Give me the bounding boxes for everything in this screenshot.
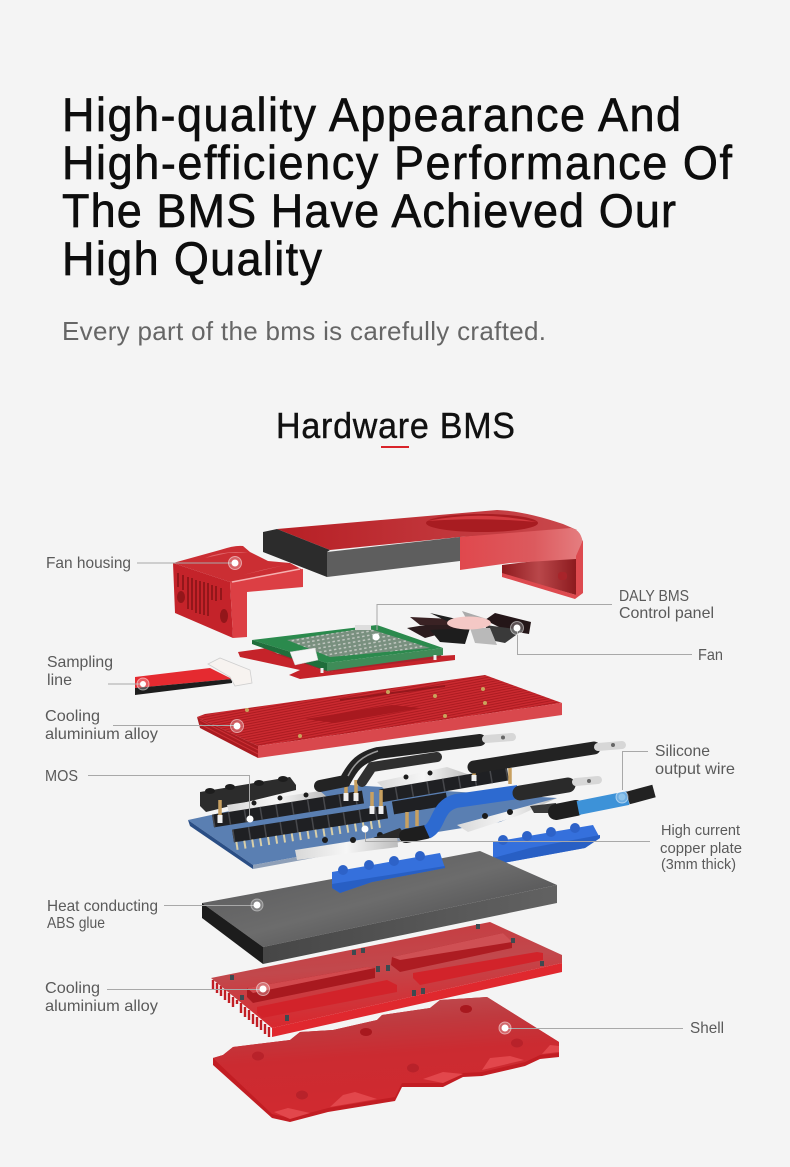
callout: Heat conducting ABS glue: Heat conducting bbox=[47, 898, 158, 915]
callout: Sampling line bbox=[47, 654, 149, 690]
title bbox=[62, 88, 732, 285]
subtitle: Every part of the bms is carefully crafted. bbox=[62, 316, 546, 346]
callout: Shell: Shell bbox=[690, 1020, 724, 1037]
callout: upper Cooling aluminium alloy: Cooling bbox=[45, 708, 100, 725]
callout: lower Cooling aluminium alloy bbox=[45, 980, 270, 1015]
exploded BMS diagram bbox=[135, 510, 654, 1122]
part: upper cooling alloy bbox=[197, 675, 562, 758]
part: control panel PCB bbox=[238, 625, 455, 679]
callout: Silicone output wire bbox=[616, 743, 735, 803]
part: copper plate right bbox=[493, 823, 600, 863]
part: heat conducting ABS glue bbox=[202, 851, 557, 964]
callout: Shell bbox=[499, 1020, 724, 1037]
section heading: Hardware BMS bbox=[276, 406, 515, 446]
callout: High current copper plate bbox=[362, 822, 742, 873]
callout: High current copper plate: (3mm thick) bbox=[661, 856, 736, 873]
part: copper plate front bbox=[332, 851, 445, 893]
part: lower cooling alloy bbox=[211, 922, 562, 1037]
callout: Silicone output wire: output wire bbox=[655, 761, 735, 778]
callout: Heat conducting ABS glue: ABS glue bbox=[47, 915, 105, 932]
callout: High current copper plate: High current bbox=[661, 822, 741, 839]
callout: Sampling line: Sampling bbox=[47, 654, 113, 671]
callout: MOS bbox=[45, 768, 254, 822]
callout: Fan housing bbox=[46, 555, 242, 572]
callout: MOS: MOS bbox=[45, 768, 78, 785]
callout: Silicone output wire: Silicone bbox=[655, 743, 710, 760]
callout: DALY BMS Control panel: DALY BMS bbox=[619, 588, 689, 605]
part: fan bbox=[407, 611, 531, 645]
callout: DALY BMS Control panel: Control panel bbox=[619, 605, 714, 622]
callout: upper Cooling aluminium alloy bbox=[45, 708, 244, 743]
title: High-quality Appearance And bbox=[62, 88, 681, 141]
title: The BMS Have Achieved Our bbox=[62, 184, 676, 237]
part: sampling line bbox=[135, 658, 252, 695]
callout: Fan housing: Fan housing bbox=[46, 555, 131, 572]
part: MOS board bbox=[188, 762, 557, 869]
callout: Fan: Fan bbox=[698, 647, 723, 664]
part: shell bbox=[213, 997, 559, 1122]
part: fan housing front bbox=[173, 546, 303, 638]
callout: Sampling line: line bbox=[47, 672, 72, 689]
part: fan housing rear bbox=[263, 510, 583, 599]
callout: Fan bbox=[510, 622, 723, 664]
title: High Quality bbox=[62, 232, 323, 285]
callout: lower Cooling aluminium alloy: aluminium alloy bbox=[45, 998, 158, 1015]
callout: High current copper plate: copper plate bbox=[660, 840, 742, 857]
title: High-efficiency Performance Of bbox=[62, 136, 732, 189]
callout: DALY BMS Control panel bbox=[372, 588, 714, 640]
part: silicone output wires bbox=[320, 736, 654, 838]
callout: Heat conducting ABS glue bbox=[47, 898, 263, 932]
callout: lower Cooling aluminium alloy: Cooling bbox=[45, 980, 100, 997]
callout: upper Cooling aluminium alloy: aluminium alloy bbox=[45, 726, 158, 743]
